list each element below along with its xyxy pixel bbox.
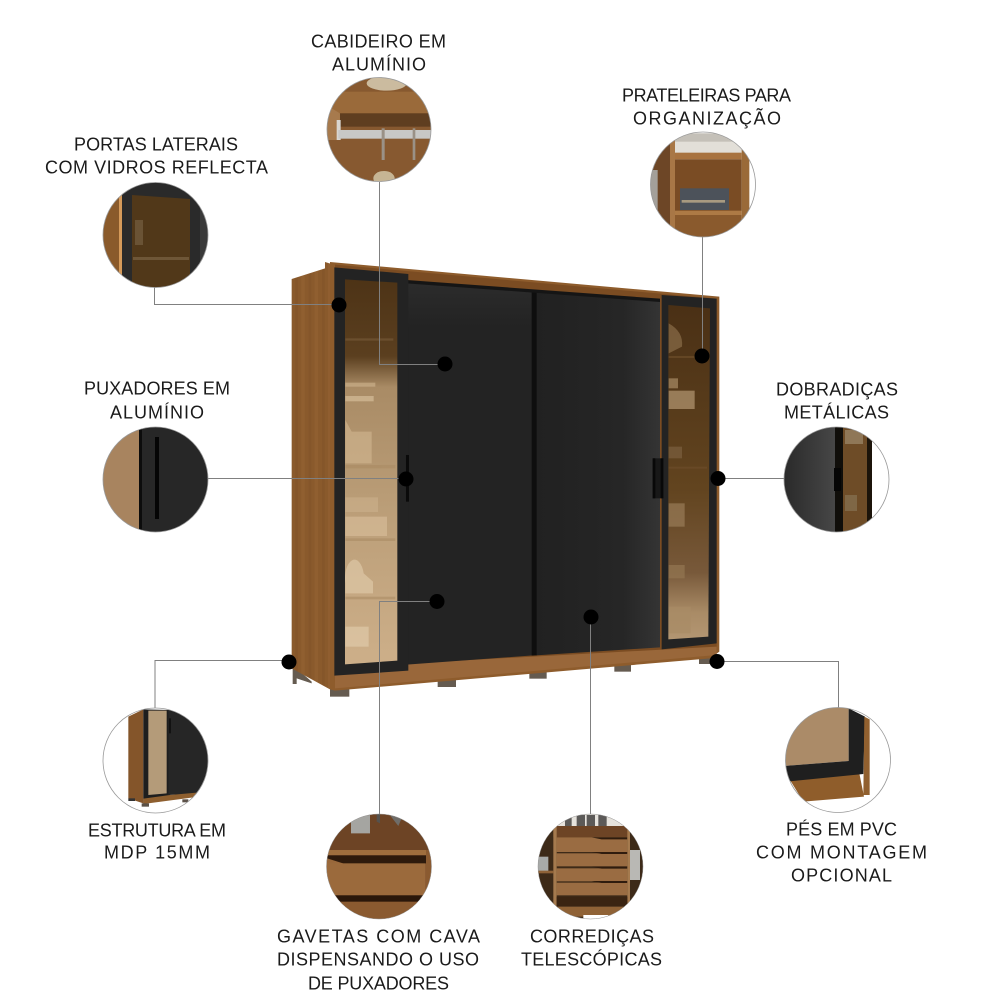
thumbnail: aluminium rail [327, 78, 431, 182]
callout: dobradicas [776, 380, 898, 535]
callout: estrutura [88, 708, 226, 862]
callout: cabideiro em aluminio [311, 32, 446, 187]
heading: portas laterais: COM VIDROS REFLECTA [45, 158, 268, 178]
heading: cabideiro [311, 32, 446, 74]
callout: pes em pvc [756, 703, 927, 886]
heading: corredicas: CORREDIÇAS [530, 926, 654, 946]
heading: pes em pvc: COM MONTAGEM [756, 842, 927, 862]
thumbnail: pvc foot [783, 703, 870, 802]
marker dots [282, 298, 726, 670]
door handle left [406, 455, 409, 502]
wardrobe [292, 262, 719, 697]
heading: cabideiro: ALUMÍNIO [332, 54, 426, 74]
thumbnail: drawer [326, 814, 432, 919]
left glass door [334, 267, 408, 676]
heading: puxadores: ALUMÍNIO [110, 402, 204, 422]
heading: cabideiro: CABIDEIRO EM [311, 32, 446, 52]
glass contents right [669, 323, 707, 633]
thumbnail: shelves [650, 133, 750, 237]
heading: prateleiras: PRATELEIRAS PARA [622, 86, 791, 106]
wardrobe feet [293, 656, 710, 697]
heading: gavetas: GAVETAS COM CAVA [277, 926, 480, 946]
heading: gavetas: DISPENSANDO O USO [277, 950, 479, 970]
callout: corredicas [521, 810, 662, 970]
door handle right [653, 458, 663, 498]
heading: pes em pvc: PÉS EM PVC [786, 820, 897, 840]
heading: corredicas: TELESCÓPICAS [521, 948, 662, 970]
heading: puxadores [84, 378, 230, 422]
right glass door [662, 295, 717, 649]
callout: puxadores [84, 378, 230, 535]
heading: dobradicas: DOBRADIÇAS [776, 380, 898, 400]
heading: puxadores: PUXADORES EM [84, 378, 230, 398]
heading: pes em pvc [756, 820, 927, 886]
wardrobe front body [330, 262, 719, 691]
heading: corredicas [521, 926, 662, 970]
callout: portas laterais [45, 134, 268, 292]
heading: pes em pvc: OPCIONAL [791, 866, 892, 886]
glass contents left [345, 338, 395, 647]
heading: estrutura: MDP 15MM [104, 842, 210, 862]
sliding door left [407, 281, 533, 665]
thumbnail: structure [128, 709, 210, 807]
heading: estrutura: ESTRUTURA EM [88, 820, 226, 840]
callout: prateleiras [622, 86, 791, 240]
heading: estrutura [88, 820, 226, 862]
heading: dobradicas [776, 380, 898, 422]
thumbnail: hinge [780, 425, 872, 535]
heading: portas laterais: PORTAS LATERAIS [74, 134, 238, 154]
connector lines [154, 182, 838, 814]
wardrobe side panel [292, 262, 335, 690]
heading: prateleiras [622, 86, 791, 128]
heading: dobradicas: METÁLICAS [784, 402, 889, 422]
heading: prateleiras: ORGANIZAÇÃO [633, 108, 781, 128]
sliding door right [536, 290, 660, 655]
thumbnail: drawer slides [538, 814, 643, 919]
heading: gavetas: DE PUXADORES [308, 974, 449, 994]
thumbnail: glass door [103, 182, 208, 288]
heading: portas laterais [45, 134, 268, 178]
door divider [532, 290, 537, 656]
callout: gavetas [277, 810, 480, 994]
thumbnail: handle [103, 427, 208, 532]
wardrobe base strip [335, 647, 717, 688]
heading: gavetas [277, 926, 480, 994]
